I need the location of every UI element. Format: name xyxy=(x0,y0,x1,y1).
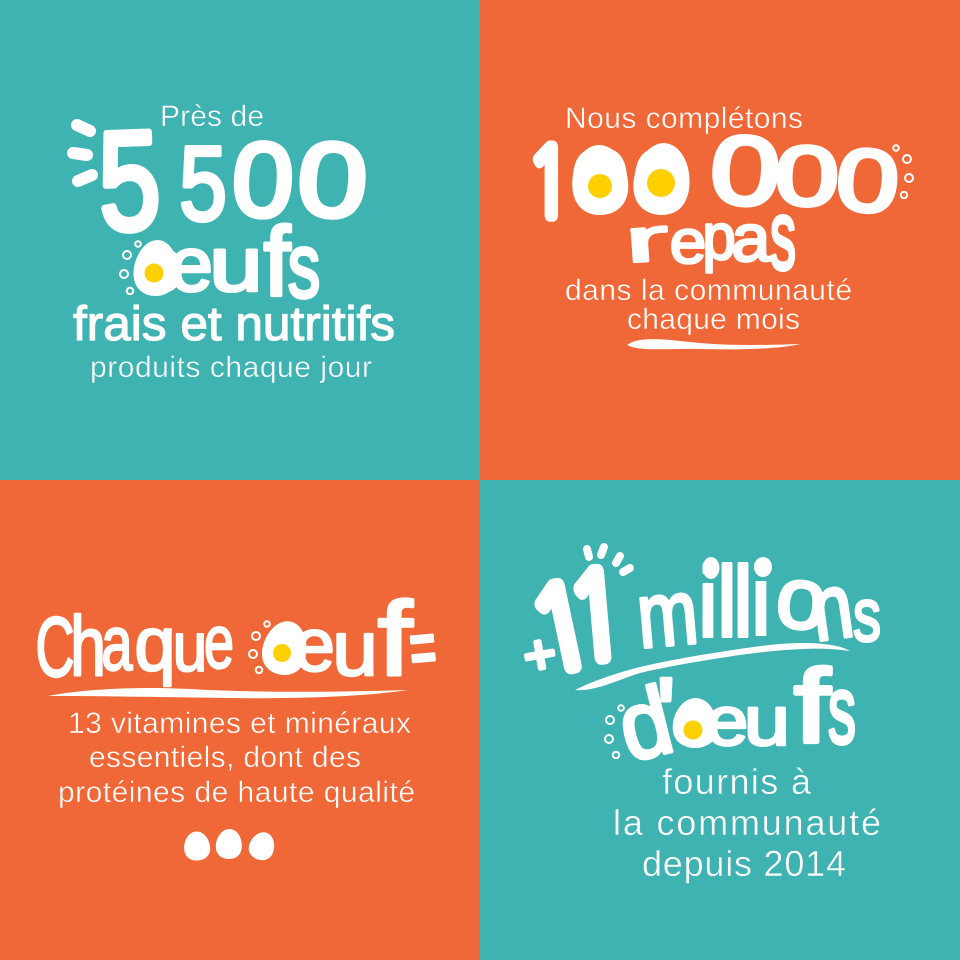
icon: bubbles xyxy=(120,241,141,294)
text: fournis à: fournis à xyxy=(662,761,812,802)
panel: every egg xyxy=(0,480,480,960)
heading: œufs with egg: œ xyxy=(139,222,213,308)
heading: Chaque œuf =: f xyxy=(378,581,413,698)
panel: 11 million eggs xyxy=(480,480,960,960)
number: 5 500 xyxy=(96,101,371,260)
number: 100 000: 0 xyxy=(707,114,784,227)
icon: sparkle rays xyxy=(73,125,92,181)
heading: repas xyxy=(622,180,796,290)
text: Nous complétons: Nous complétons xyxy=(565,102,803,135)
heading: Chaque œuf =: œ xyxy=(265,604,335,687)
heading: millions: i xyxy=(750,545,772,657)
number: +11 xyxy=(518,556,630,691)
underline stroke xyxy=(48,688,408,698)
icon: fried egg xyxy=(131,238,181,298)
heading: Chaque œuf =: = xyxy=(406,605,440,691)
heading: d'œufs with egg: u xyxy=(744,683,790,760)
heading: millions: m xyxy=(633,559,702,668)
heading: Chaque œuf =: a xyxy=(101,601,133,687)
icon: three eggs xyxy=(183,828,278,863)
text: essentiels, dont des: essentiels, dont des xyxy=(89,741,361,774)
underline stroke xyxy=(575,643,850,690)
heading: millions: o xyxy=(772,547,831,649)
icon: sparkle rays xyxy=(587,547,630,572)
number: +11: + xyxy=(518,621,561,688)
heading: œufs with egg: f xyxy=(264,208,291,316)
number: 100 000: 1 xyxy=(526,136,572,230)
heading: œufs with egg: u xyxy=(209,222,263,308)
number: 5 500: 0 xyxy=(229,120,297,240)
text: depuis 2014: depuis 2014 xyxy=(642,843,846,884)
number: 100 000: 0 xyxy=(571,130,629,231)
number: 100 000: 0 xyxy=(832,130,903,233)
heading: Chaque œuf =: u xyxy=(332,605,378,692)
panel: 5 500 eggs per day xyxy=(0,0,480,480)
icon: egg two xyxy=(630,140,694,218)
text: 13 vitamines et minéraux: 13 vitamines et minéraux xyxy=(68,707,411,740)
heading: millions: i xyxy=(697,547,719,659)
heading: d'œufs with egg: d xyxy=(608,666,682,782)
number: 100 000 xyxy=(526,114,913,233)
heading: millions: n xyxy=(804,553,859,661)
heading: Chaque œuf =: u xyxy=(173,609,207,687)
heading: d'œufs with egg xyxy=(605,647,856,782)
heading: repas: s xyxy=(770,180,796,290)
text: protéines de haute qualité: protéines de haute qualité xyxy=(58,776,415,809)
subheading: frais et nutritifs: frais et nutritifs xyxy=(73,298,395,351)
heading: Chaque œuf =: h xyxy=(70,599,106,693)
heading: Chaque œuf =: q xyxy=(134,601,176,686)
panel: 100 000 meals xyxy=(480,0,960,480)
text: chaque mois: chaque mois xyxy=(627,303,800,336)
number: +11: 1 xyxy=(520,567,603,691)
heading: d'œufs with egg: s xyxy=(828,655,856,764)
icon: large i dot xyxy=(702,557,720,579)
heading: Chaque œuf =: e xyxy=(204,600,234,684)
text: produits chaque jour: produits chaque jour xyxy=(90,351,372,384)
heading: Chaque œuf = xyxy=(35,581,440,698)
number: 5 500: 0 xyxy=(294,120,371,241)
heading: d'œufs with egg: œ xyxy=(676,681,748,760)
heading: millions: s xyxy=(853,574,881,658)
heading: d'œufs with egg: f xyxy=(794,647,830,764)
number: 5 500: 5 xyxy=(96,101,163,260)
icon: fried egg xyxy=(671,696,719,750)
underline stroke xyxy=(627,339,800,349)
heading: repas: e xyxy=(670,207,706,277)
heading: repas: a xyxy=(732,200,771,276)
icon: fried egg xyxy=(258,617,312,679)
heading: millions: l xyxy=(716,546,738,659)
heading: œufs with egg: s xyxy=(288,214,320,317)
heading: millions: l xyxy=(732,546,754,659)
icon: egg one xyxy=(570,144,630,216)
text: dans la communauté: dans la communauté xyxy=(565,274,852,307)
heading: œufs with egg xyxy=(120,208,320,317)
icon: bubbles xyxy=(893,145,913,198)
number: 100 000: 0 xyxy=(633,130,691,231)
text: Près de: Près de xyxy=(160,100,264,133)
heading: Chaque œuf =: C xyxy=(35,600,75,694)
heading: repas: p xyxy=(702,201,736,274)
icon: bubbles xyxy=(249,621,270,673)
number: +11: 1 xyxy=(563,556,630,678)
number: 5 500: 5 xyxy=(179,126,227,243)
number: 100 000: 0 xyxy=(773,129,841,224)
heading: millions xyxy=(633,545,881,668)
heading: repas: r xyxy=(622,204,671,276)
icon: large i dot xyxy=(754,557,772,577)
icon: bubbles xyxy=(605,705,624,758)
heading: d'œufs with egg: ' xyxy=(656,658,676,770)
text: la communauté: la communauté xyxy=(613,802,881,843)
